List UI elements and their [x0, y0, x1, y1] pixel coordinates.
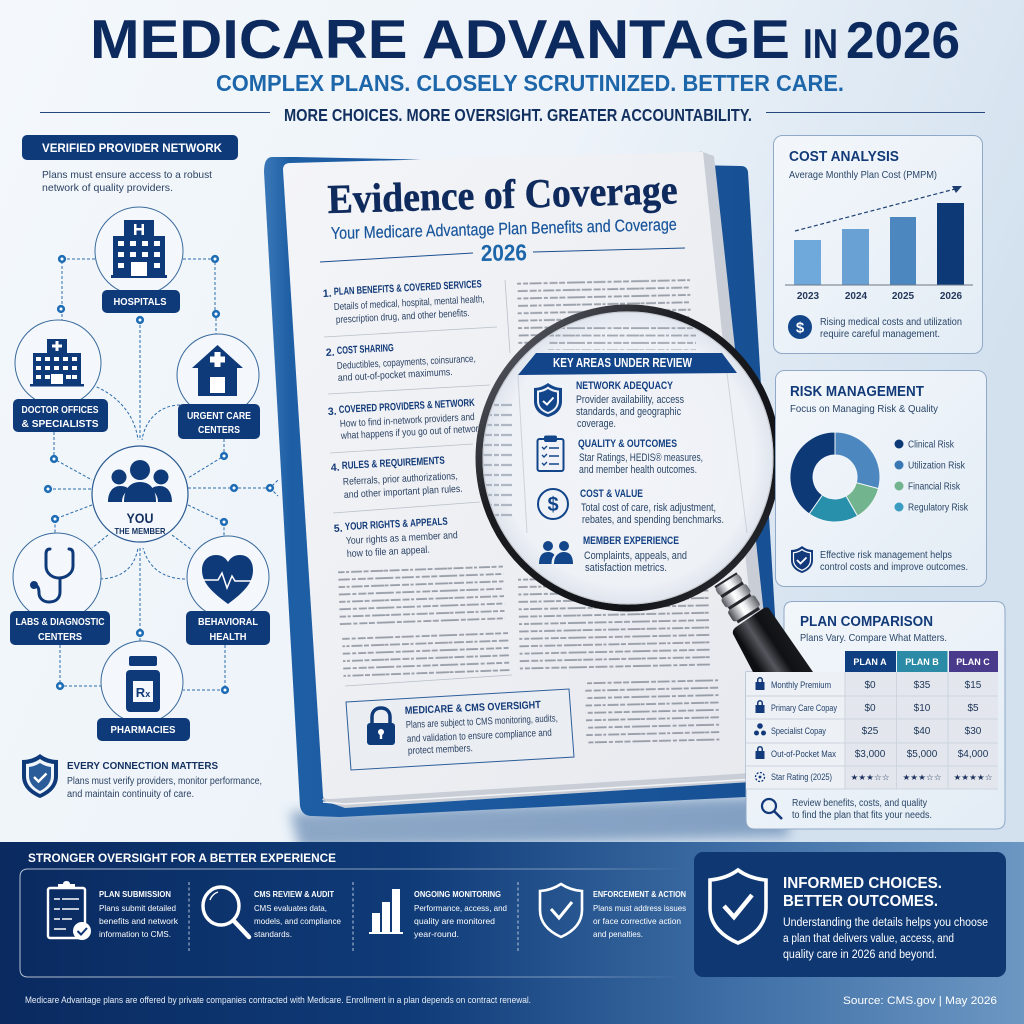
band heading: KEY AREAS UNDER REVIEW: [553, 355, 693, 370]
step: plan submission: [48, 881, 179, 940]
table rows: Monthly Premium: [771, 680, 831, 690]
oversight text: Plans are subject to CMS monitoring, audits,: [406, 713, 558, 731]
bar chart: [785, 186, 973, 302]
cost heading: COST ANALYSIS: [789, 149, 899, 165]
review text: [583, 535, 687, 574]
document: evidence of coverage: [264, 151, 790, 850]
step text: [254, 889, 341, 939]
oversight text: protect members.: [408, 743, 473, 757]
step text: information to CMS.: [99, 929, 171, 939]
step text: models, and compliance: [254, 916, 341, 926]
network intro text: Plans must ensure access to a robust: [42, 170, 212, 181]
icon: shield: [534, 383, 562, 417]
review text: satisfaction metrics.: [585, 562, 667, 574]
label: doctor offices: DOCTOR OFFICES: [22, 404, 98, 416]
icon: two members: [539, 541, 573, 564]
table rows: $5,000: [907, 749, 938, 760]
risk heading: RISK MANAGEMENT: [790, 384, 924, 400]
review text: Star Ratings, HEDIS® measures,: [579, 452, 703, 464]
panel: cost analysis: [774, 136, 982, 354]
review text: standards, and geographic: [576, 406, 681, 418]
risk note: control costs and improve outcomes.: [820, 562, 968, 573]
section 2: and out-of-pocket maximums.: [338, 367, 453, 384]
review item: member experience: [539, 535, 687, 574]
icon: members: [108, 460, 172, 502]
table rows: ★★★☆☆: [902, 773, 942, 782]
icon: clipboard check: [48, 881, 91, 940]
donut legend: Financial Risk: [908, 482, 961, 492]
table rows: ★★★☆☆: [850, 773, 890, 782]
section 2: COST SHARING: [337, 342, 394, 357]
network connection lines: [48, 259, 278, 690]
oversight text: [406, 713, 558, 757]
step text: CMS REVIEW & AUDIT: [254, 889, 335, 899]
cost note: Rising medical costs and utilization: [820, 317, 962, 328]
review text: [576, 380, 684, 430]
separators: [189, 882, 518, 953]
callout heading: BETTER OUTCOMES.: [783, 893, 938, 910]
document subtitle: Your Medicare Advantage Plan Benefits and Coverage: [331, 215, 677, 243]
callout text: quality care in 2026 and beyond.: [783, 949, 937, 961]
step text: Plans submit detailed: [99, 903, 176, 913]
icon: hospital: [111, 220, 167, 278]
bar chart: 2025: [892, 291, 915, 302]
table rows: Star Rating (2025): [771, 772, 832, 782]
review text: COST & VALUE: [580, 488, 643, 500]
icon: lock: [367, 708, 395, 745]
section 1: 1.: [323, 288, 332, 300]
section 3: COVERED PROVIDERS & NETWORK: [339, 397, 475, 416]
label: doctor offices: & SPECIALISTS: [22, 418, 98, 430]
table rows: $10: [914, 703, 931, 714]
section 4: RULES & REQUIREMENTS: [342, 455, 445, 472]
icon: urgent care house: [192, 345, 243, 396]
table rows: $25: [862, 726, 879, 737]
step text: Performance, access, and: [414, 903, 507, 913]
network connection nodes: [45, 256, 273, 693]
icon: clipboard: [538, 436, 564, 471]
review text: rebates, and spending benchmarks.: [582, 514, 724, 526]
network intro text: network of quality providers.: [42, 183, 173, 194]
bar chart: 2023: [797, 291, 820, 302]
footer disclaimer: Medicare Advantage plans are offered by private companies contracted with Medicare. Enrollment in a plan depends on contract renewal.: [25, 995, 531, 1005]
oversight heading: MEDICARE & CMS OVERSIGHT: [405, 699, 542, 717]
section 1: prescription drug, and other benefits.: [336, 308, 470, 326]
cost note: require careful management.: [820, 329, 940, 340]
comparison subheading: Plans Vary. Compare What Matters.: [800, 632, 947, 644]
cost note: [788, 315, 962, 340]
step text: PLAN SUBMISSION: [99, 889, 171, 899]
node: urgent care: [177, 334, 260, 439]
section 4: Referrals, prior authorizations,: [343, 471, 458, 488]
step: enforcement and action: [540, 884, 686, 939]
cost note: $: [796, 320, 805, 336]
review item: network adequacy: [534, 380, 684, 430]
section 5: YOUR RIGHTS & APPEALS: [345, 516, 448, 533]
section 3: 3.: [328, 406, 337, 418]
step: ongoing monitoring: [369, 889, 507, 939]
label: urgent care: CENTERS: [198, 424, 240, 436]
review text: Provider availability, access: [576, 394, 684, 406]
icon: magnifier: [203, 887, 249, 937]
table rows: $35: [914, 680, 931, 691]
table rows: $40: [914, 726, 931, 737]
step: cms review and audit: [203, 887, 341, 939]
callout heading: INFORMED CHOICES.: [783, 875, 942, 892]
node: labs: [10, 533, 110, 645]
section 4: [331, 455, 463, 501]
page stack: [322, 151, 782, 808]
lens magnified fine print: [482, 322, 747, 533]
node: hospitals: [95, 207, 183, 313]
step text: ENFORCEMENT & ACTION: [593, 889, 686, 899]
section 1: [323, 278, 485, 326]
label: behavioral health: HEALTH: [210, 631, 246, 643]
magnifier handle: [733, 607, 813, 672]
callout text: EVERY CONNECTION MATTERS: [67, 760, 218, 772]
cost subheading: Average Monthly Plan Cost (PMPM): [789, 169, 937, 181]
step text: [593, 889, 686, 939]
review text: [578, 438, 703, 476]
table rows: $30: [965, 726, 982, 737]
node: you the member: [92, 446, 188, 542]
icon: shield: [22, 754, 58, 798]
donut legend: Clinical Risk: [908, 440, 955, 450]
step text: benefits and network: [99, 916, 179, 926]
icon: rx bottle: Rx: [136, 685, 150, 700]
bar chart: 2026: [940, 291, 963, 302]
section 4: 4.: [331, 462, 340, 474]
review text: NETWORK ADEQUACY: [576, 380, 674, 392]
label: hospitals: HOSPITALS: [114, 296, 166, 308]
document year: [320, 239, 685, 266]
band heading: STRONGER OVERSIGHT FOR A BETTER EXPERIENCE: [28, 851, 336, 865]
callout heading: [783, 875, 942, 910]
network heading: VERIFIED PROVIDER NETWORK: [42, 141, 222, 155]
section 5: how to file an appeal.: [347, 545, 430, 560]
section 1: Details of medical, hospital, mental health,: [334, 294, 485, 313]
comparison note: Review benefits, costs, and quality: [792, 798, 927, 809]
label: labs: LABS & DIAGNOSTIC: [16, 616, 105, 628]
bar chart: 2024: [845, 291, 868, 302]
title: MEDICARE ADVANTAGE: [90, 8, 790, 70]
magnifying glass: [479, 308, 777, 625]
document year: 2026: [481, 239, 527, 266]
panel: stronger oversight band: [0, 842, 1024, 1024]
section 5: [334, 516, 458, 560]
review text: Total cost of care, risk adjustment,: [581, 502, 716, 514]
title: IN: [803, 20, 838, 67]
panel: risk management: [776, 370, 986, 586]
section 1: PLAN BENEFITS & COVERED SERVICES: [334, 278, 482, 298]
callout text: Understanding the details helps you choose: [783, 917, 988, 929]
label: behavioral health: [186, 611, 270, 645]
table rows: $4,000: [958, 749, 989, 760]
comparison note: to find the plan that fits your needs.: [792, 810, 932, 821]
label: urgent care: URGENT CARE: [187, 410, 251, 422]
step text: Plans must address issues: [593, 903, 686, 913]
section 3: How to find in-network providers and: [340, 412, 475, 430]
section 3: what happens if you go out of network: [340, 424, 484, 442]
panel: plan comparison: [746, 602, 1005, 829]
label: you: YOU: [126, 510, 154, 526]
oversight text: and validation to ensure compliance and: [407, 728, 552, 745]
donut chart: [790, 432, 880, 522]
review item: quality and outcomes: [538, 436, 703, 476]
callout: informed choices: [694, 852, 1006, 977]
callout text: [67, 760, 262, 800]
step text: [414, 889, 507, 939]
section 3: [328, 397, 484, 442]
table rows: $3,000: [855, 749, 886, 760]
icon: dollar: [538, 489, 568, 519]
icon: dollar: $: [547, 494, 559, 516]
label: behavioral health: BEHAVIORAL: [198, 616, 259, 628]
section list: [323, 278, 512, 686]
section 5: Your rights as a member and: [346, 530, 458, 547]
section 2: [326, 342, 476, 384]
step text: quality are monitored: [414, 916, 495, 926]
callout text: Plans must verify providers, monitor performance,: [67, 776, 262, 787]
table rows: ★★★★☆: [954, 773, 992, 782]
section 4: and other important plan rules.: [344, 484, 463, 501]
step text: standards.: [254, 929, 292, 939]
network intro text: [42, 170, 212, 194]
risk subheading: Focus on Managing Risk & Quality: [790, 403, 939, 415]
table rows: Specialist Copay: [771, 726, 826, 736]
label: labs: [10, 611, 110, 645]
label: the member: THE MEMBER: [114, 526, 166, 536]
fine print blocks: [338, 276, 719, 745]
step text: and penalties.: [593, 929, 643, 939]
subtitle: COMPLEX PLANS. CLOSELY SCRUTINIZED. BETTER CARE.: [216, 70, 844, 96]
document shadow: [290, 796, 790, 850]
callout: every connection matters: [22, 754, 262, 800]
table rows: $15: [965, 680, 982, 691]
lens collar: [712, 571, 763, 625]
risk note: Effective risk management helps: [820, 550, 952, 561]
band heading: [518, 353, 737, 375]
node: behavioral health: [186, 536, 270, 645]
callout text: and maintain continuity of care.: [67, 789, 194, 800]
review item: cost and value: [538, 488, 724, 526]
table header: PLAN A: [853, 657, 887, 667]
comparison heading: PLAN COMPARISON: [800, 614, 933, 630]
network heading: [22, 135, 238, 160]
donut legend: [894, 440, 969, 514]
icon: stethoscope: [32, 549, 73, 602]
icon: large shield: [710, 870, 766, 943]
footer source: Source: CMS.gov | May 2026: [843, 995, 997, 1007]
label: urgent care: [178, 404, 260, 439]
icon: shield check: [540, 884, 582, 937]
step text: year-round.: [414, 929, 459, 939]
section 2: Deductibles, copayments, coinsurance,: [337, 354, 476, 372]
icon: heart: [202, 555, 253, 604]
step text: [99, 889, 179, 939]
table rows: Primary Care Copay: [771, 703, 837, 713]
step text: or face corrective action: [593, 916, 681, 926]
oversight box: [346, 689, 574, 770]
risk note: [791, 546, 968, 573]
table header: PLAN C: [956, 657, 990, 667]
node: pharmacies: [97, 641, 190, 741]
table header: PLAN B: [905, 657, 939, 667]
label: doctor offices: [13, 399, 108, 432]
lens: [479, 308, 777, 608]
step text: CMS evaluates data,: [254, 903, 327, 913]
callout text: a plan that delivers value, access, and: [783, 933, 954, 945]
donut legend: Regulatory Risk: [908, 502, 969, 514]
process frame: [20, 869, 680, 977]
review text: QUALITY & OUTCOMES: [578, 438, 677, 450]
table rows: [746, 672, 998, 789]
label: labs: CENTERS: [38, 631, 82, 643]
review text: [580, 488, 724, 526]
step text: ONGOING MONITORING: [414, 889, 501, 899]
table rows: Out-of-Pocket Max: [771, 749, 836, 759]
callout text: [783, 917, 988, 961]
blue cover: [264, 157, 786, 817]
panel: verified provider network: [10, 135, 278, 800]
label: pharmacies: PHARMACIES: [110, 724, 176, 736]
table rows: $5: [967, 703, 979, 714]
table rows: $0: [864, 703, 876, 714]
icon: bar chart: [369, 889, 403, 934]
review text: MEMBER EXPERIENCE: [583, 535, 679, 547]
icon: clinic: [30, 339, 84, 386]
table header: [845, 651, 998, 672]
lens panel: key areas under review: [518, 353, 737, 574]
table rows: $0: [864, 680, 876, 691]
tagline: MORE CHOICES. MORE OVERSIGHT. GREATER ACCOUNTABILITY.: [284, 105, 752, 125]
review text: coverage.: [577, 418, 616, 430]
lens ring: [479, 308, 777, 608]
node: doctor offices: [13, 320, 108, 432]
section 2: 2.: [326, 347, 335, 359]
front page: [283, 152, 768, 799]
comparison table: [746, 651, 998, 789]
heading: evidence of coverage: Evidence of Coverage: [327, 166, 678, 222]
review text: and member health outcomes.: [579, 464, 697, 476]
review text: Complaints, appeals, and: [584, 550, 687, 562]
title: 2026: [846, 12, 960, 70]
section 5: 5.: [334, 523, 343, 535]
donut legend: Utilization Risk: [908, 460, 966, 472]
comparison note: [762, 798, 932, 821]
